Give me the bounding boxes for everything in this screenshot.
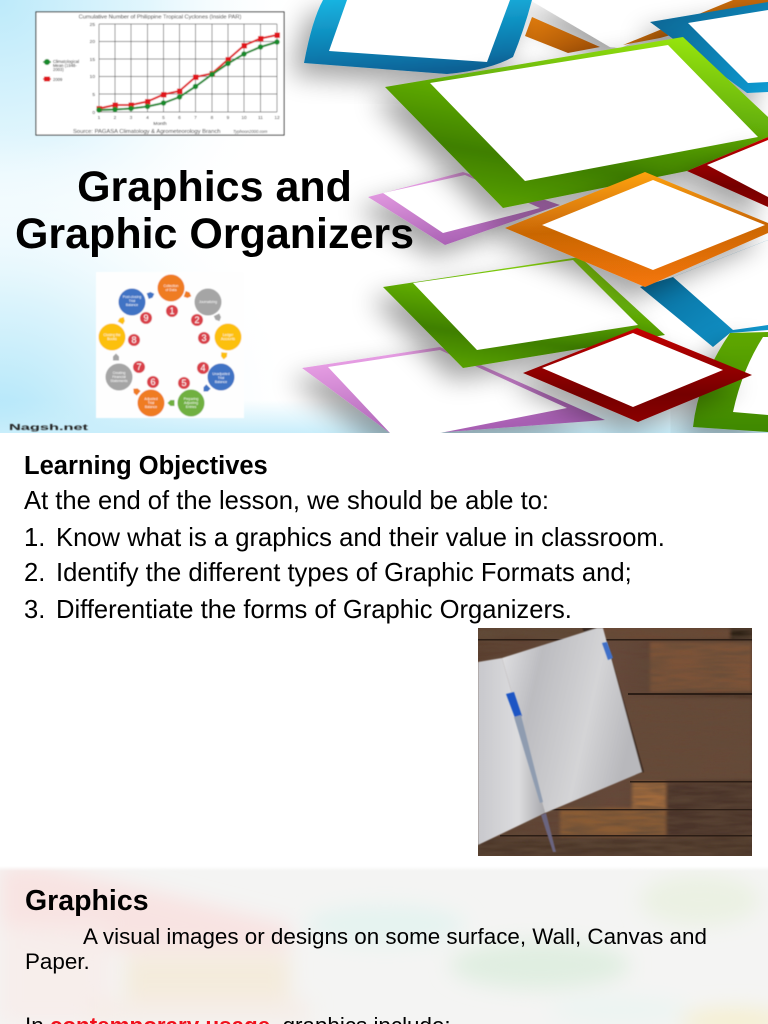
step captions: Journalizing [199,300,217,304]
objective 3 [24,596,572,624]
cumulative cyclones line chart [36,12,284,135]
step captions: Adjusted [144,397,158,401]
step captions: Creating [113,371,126,375]
chart grid [99,24,277,112]
x axis labels: 2 [114,115,117,121]
x axis labels: 3 [130,115,133,121]
step captions: Unadjusted [212,372,230,376]
cumulative cyclones line chart: Typhoon2000.com [233,129,268,134]
step captions [104,284,235,409]
title: Graphic Organizers [15,210,414,258]
x axis labels: 5 [162,115,165,121]
orange card top [525,0,768,53]
y axis labels: 0 [92,110,95,116]
graphics definition [25,924,707,974]
y axis labels: 5 [92,92,95,98]
objectives list [24,524,665,624]
chart source: Source: PAGASA Climatology & Agrometeorology Branch [73,129,220,135]
step numbers: 6 [150,377,156,387]
step numbers: 1 [169,306,175,316]
step captions: Closing the [104,333,121,337]
y axis labels: 15 [90,57,95,63]
step circles [98,274,242,416]
hero panel [0,0,768,433]
purple card bottom [302,347,605,433]
red diamond card [523,328,752,422]
blue card lower right [640,240,768,347]
x axis labels: 12 [274,115,280,121]
chart legend: Mean (1948- [53,63,77,68]
definition first line: A visual images or designs on some surface, Wall, Canvas and [83,924,707,949]
x axis labels: 9 [227,115,230,121]
step captions: Collection [164,284,179,288]
x axis labels: 6 [178,115,181,121]
large green card [385,37,768,208]
y axis labels: 20 [90,39,95,45]
y axis labels: 10 [90,74,95,80]
objective 3: 3. [24,596,45,624]
x axis labels: 4 [146,115,149,121]
cycle diagram [96,272,244,418]
step numbers: 8 [131,335,137,345]
watermark: Nagsh.net [9,423,89,432]
x axis labels: Month [153,121,167,127]
step numbers: 9 [143,313,149,323]
wood planks [478,628,752,856]
objective 1: 1. [24,524,45,552]
objective 1 [24,524,665,552]
step captions: Balance [215,380,227,384]
wood grain [478,628,752,856]
step numbers: 4 [200,363,206,373]
step captions: Post-closing [123,295,141,299]
notebook photo [478,628,752,856]
step numbers: 2 [194,315,200,325]
y axis labels: 25 [90,22,95,28]
chart legend: Climatological [53,59,79,64]
series climatological mean [96,39,280,113]
graphics heading: Graphics [25,885,149,917]
series 2009 [96,32,280,112]
objectives list: Differentiate the forms of Graphic Organizers. [56,596,572,624]
title [15,163,414,258]
step arrows [113,291,227,406]
chart legend: 2009 [53,77,63,82]
step captions: Adjusting [184,401,198,405]
step captions: Balance [145,405,157,409]
step numbers: 3 [201,333,207,343]
blue card top left [304,0,532,74]
objectives list: Identify the different types of Graphic Formats and; [56,559,632,587]
objective 2 [24,559,632,587]
blue card top right [650,2,768,93]
step captions: of Data [166,288,177,292]
step captions: Balance [126,303,138,307]
objectives list: Know what is a graphics and their value in classroom. [56,524,665,552]
step captions: Trial [218,376,224,380]
x axis labels: 11 [258,115,263,121]
notebook pages [478,628,644,845]
learning objectives heading: Learning Objectives [24,452,268,480]
chart legend [43,59,79,82]
step captions: Statements [110,379,128,383]
step captions: Entries [186,405,197,409]
step captions: Trial [148,401,154,405]
green card lower [383,257,665,368]
step captions: Books [107,337,117,341]
definition second line: Paper. [25,949,90,974]
objectives intro: At the end of the lesson, we should be able to: [24,487,549,515]
graphics panel background [0,868,768,1024]
step numbers: 7 [136,362,142,372]
x axis labels: 1 [98,115,101,121]
x axis labels [98,115,280,127]
step captions: Trial [129,299,135,303]
orange diamond card [505,172,768,287]
step numbers: 5 [181,378,187,388]
step captions: Ledger [223,333,234,337]
white card behind top [530,0,733,48]
purple card middle [368,172,560,245]
step numbers [128,305,210,389]
x axis labels: 7 [194,115,197,121]
step captions: Financial [112,375,126,379]
chart legend: 2003) [53,67,64,72]
x axis labels: 10 [241,115,247,121]
step captions: Preparing [184,397,198,401]
title: Graphics and [77,163,352,211]
x axis labels: 8 [211,115,214,121]
green card bottom right [693,332,768,432]
pen [506,642,613,852]
objective 2: 2. [24,559,45,587]
y axis labels [90,22,95,116]
red card right [687,137,768,207]
chart title: Cumulative Number of Philippine Tropical Cyclones (Inside PAR) [79,14,241,20]
step captions: Accounts [221,337,235,341]
